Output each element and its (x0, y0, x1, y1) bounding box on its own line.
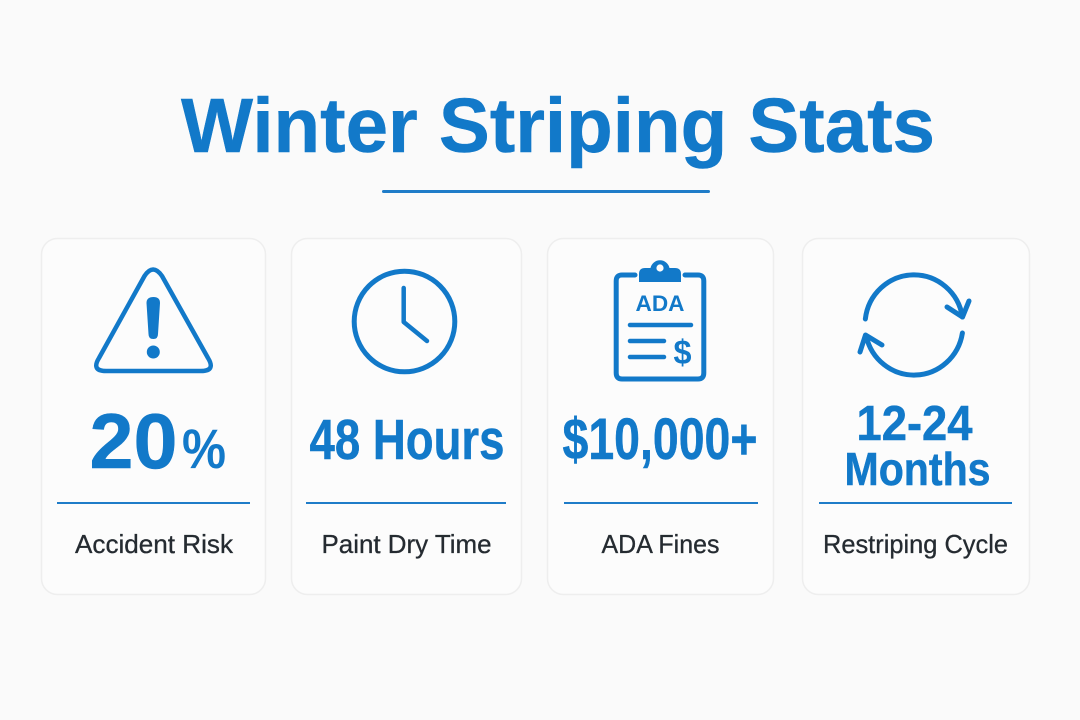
icon: clipboard: $ (674, 334, 692, 372)
icon: cycle arrows (860, 275, 969, 375)
stat: 12-24 months: Months (844, 443, 990, 495)
icon: clock (354, 271, 455, 372)
panel: ada fines (548, 238, 774, 594)
stat: 48 hours: 48 Hours (310, 408, 504, 472)
label: ada fines: ADA Fines (602, 529, 720, 559)
panel: accident risk (42, 238, 266, 594)
label: paint dry time: Paint Dry Time (322, 529, 492, 559)
panel: restriping cycle (802, 238, 1030, 594)
icon: warning triangle (96, 270, 211, 371)
label: accident risk: Accident Risk (75, 529, 234, 559)
label: restriping cycle: Restriping Cycle (823, 529, 1008, 559)
stat: 12-24 months: 12-24 (856, 397, 972, 451)
icon: clipboard (616, 260, 704, 379)
title: Winter Striping Stats (181, 83, 935, 169)
stat: 20%: % (182, 417, 226, 480)
stat: 20%: 20 (90, 397, 178, 485)
stat: 12-24 months (844, 397, 990, 495)
stat: $10,000+: $10,000+ (562, 407, 758, 472)
icon: clipboard: ADA (636, 291, 685, 316)
panel: paint dry time (292, 238, 522, 594)
stat: 20% (90, 397, 226, 485)
